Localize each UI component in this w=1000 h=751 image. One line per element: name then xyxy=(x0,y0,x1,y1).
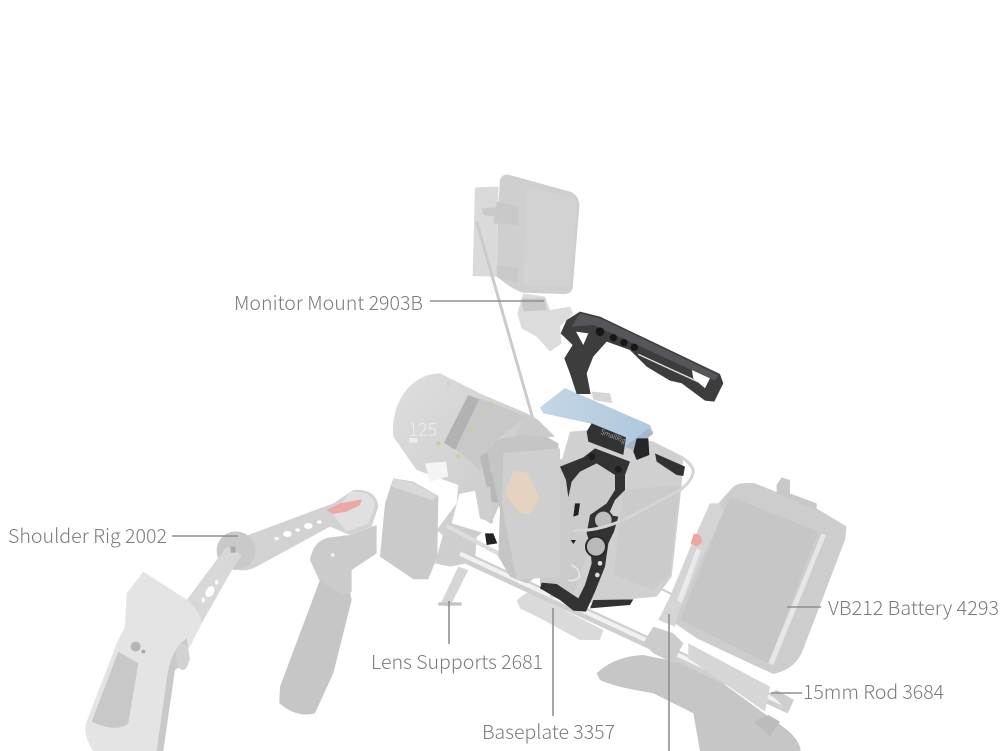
upper rod xyxy=(447,526,520,565)
battery body xyxy=(673,483,847,674)
white gap xyxy=(452,491,497,543)
round logo xyxy=(568,565,579,581)
main rod xyxy=(460,555,790,708)
camera centre plate xyxy=(540,450,620,593)
swivel arm xyxy=(517,293,573,352)
red tab xyxy=(691,533,702,547)
joint xyxy=(217,531,255,570)
illustration: shoulder rig arm and grip xyxy=(85,490,378,751)
top connector xyxy=(777,477,817,510)
monitor clamp xyxy=(482,202,518,283)
shoulder pad xyxy=(597,655,801,751)
illustration: VB212 battery plate xyxy=(658,477,847,674)
bracket xyxy=(475,487,493,523)
rail clamp xyxy=(435,533,477,567)
blue device xyxy=(540,388,653,450)
illustration: monitor and mounting arm xyxy=(473,175,579,428)
clamp logo: SmallRig xyxy=(599,426,628,445)
camera rear grey block xyxy=(550,430,683,603)
rod clamps xyxy=(643,627,683,663)
leather badge xyxy=(505,470,539,515)
baseplate xyxy=(517,592,603,640)
knobs xyxy=(594,511,613,529)
focus rings xyxy=(444,395,479,450)
illustration: top handle xyxy=(561,312,723,403)
battery side strip xyxy=(768,533,826,665)
dark knob xyxy=(485,533,497,545)
holes xyxy=(283,531,292,537)
monitor body xyxy=(497,175,579,294)
cage frame xyxy=(540,448,630,612)
lens barrel xyxy=(393,373,540,550)
lens engraving: 125 xyxy=(408,416,437,442)
screw xyxy=(588,453,595,460)
dark slot xyxy=(571,503,580,544)
lens support post xyxy=(440,567,468,607)
shoulder grip xyxy=(85,572,202,751)
illustration: lens xyxy=(393,373,540,550)
monitor back plate xyxy=(473,187,498,277)
cable xyxy=(573,457,693,531)
SmallRig clamp xyxy=(587,423,626,455)
label: shoulder rig: Shoulder Rig 2002 xyxy=(8,520,167,549)
label: rod: 15mm Rod 3684 xyxy=(803,676,944,705)
illustration: camera body and cage xyxy=(540,388,693,612)
monitor screen xyxy=(523,187,577,287)
illustration: side battery xyxy=(380,478,497,607)
label: monitor mount: Monitor Mount 2903B xyxy=(234,287,423,316)
leader lines xyxy=(172,301,821,751)
hand grip xyxy=(279,573,352,715)
handle base clamp xyxy=(592,392,612,403)
label: baseplate: Baseplate 3357 xyxy=(482,716,615,745)
illustration: rods, baseplate and shoulder pad xyxy=(447,526,801,751)
upper arm xyxy=(230,490,378,570)
battery plate xyxy=(658,503,723,627)
lower arm xyxy=(187,547,242,623)
red knob xyxy=(327,499,362,514)
label: battery: VB212 Battery 4293 xyxy=(828,592,999,621)
monitor rod xyxy=(477,222,536,428)
illustration: camera side cage with leather panel xyxy=(487,413,560,583)
lens mount highlight xyxy=(425,462,448,482)
label: lens supports: Lens Supports 2681 xyxy=(371,646,543,675)
